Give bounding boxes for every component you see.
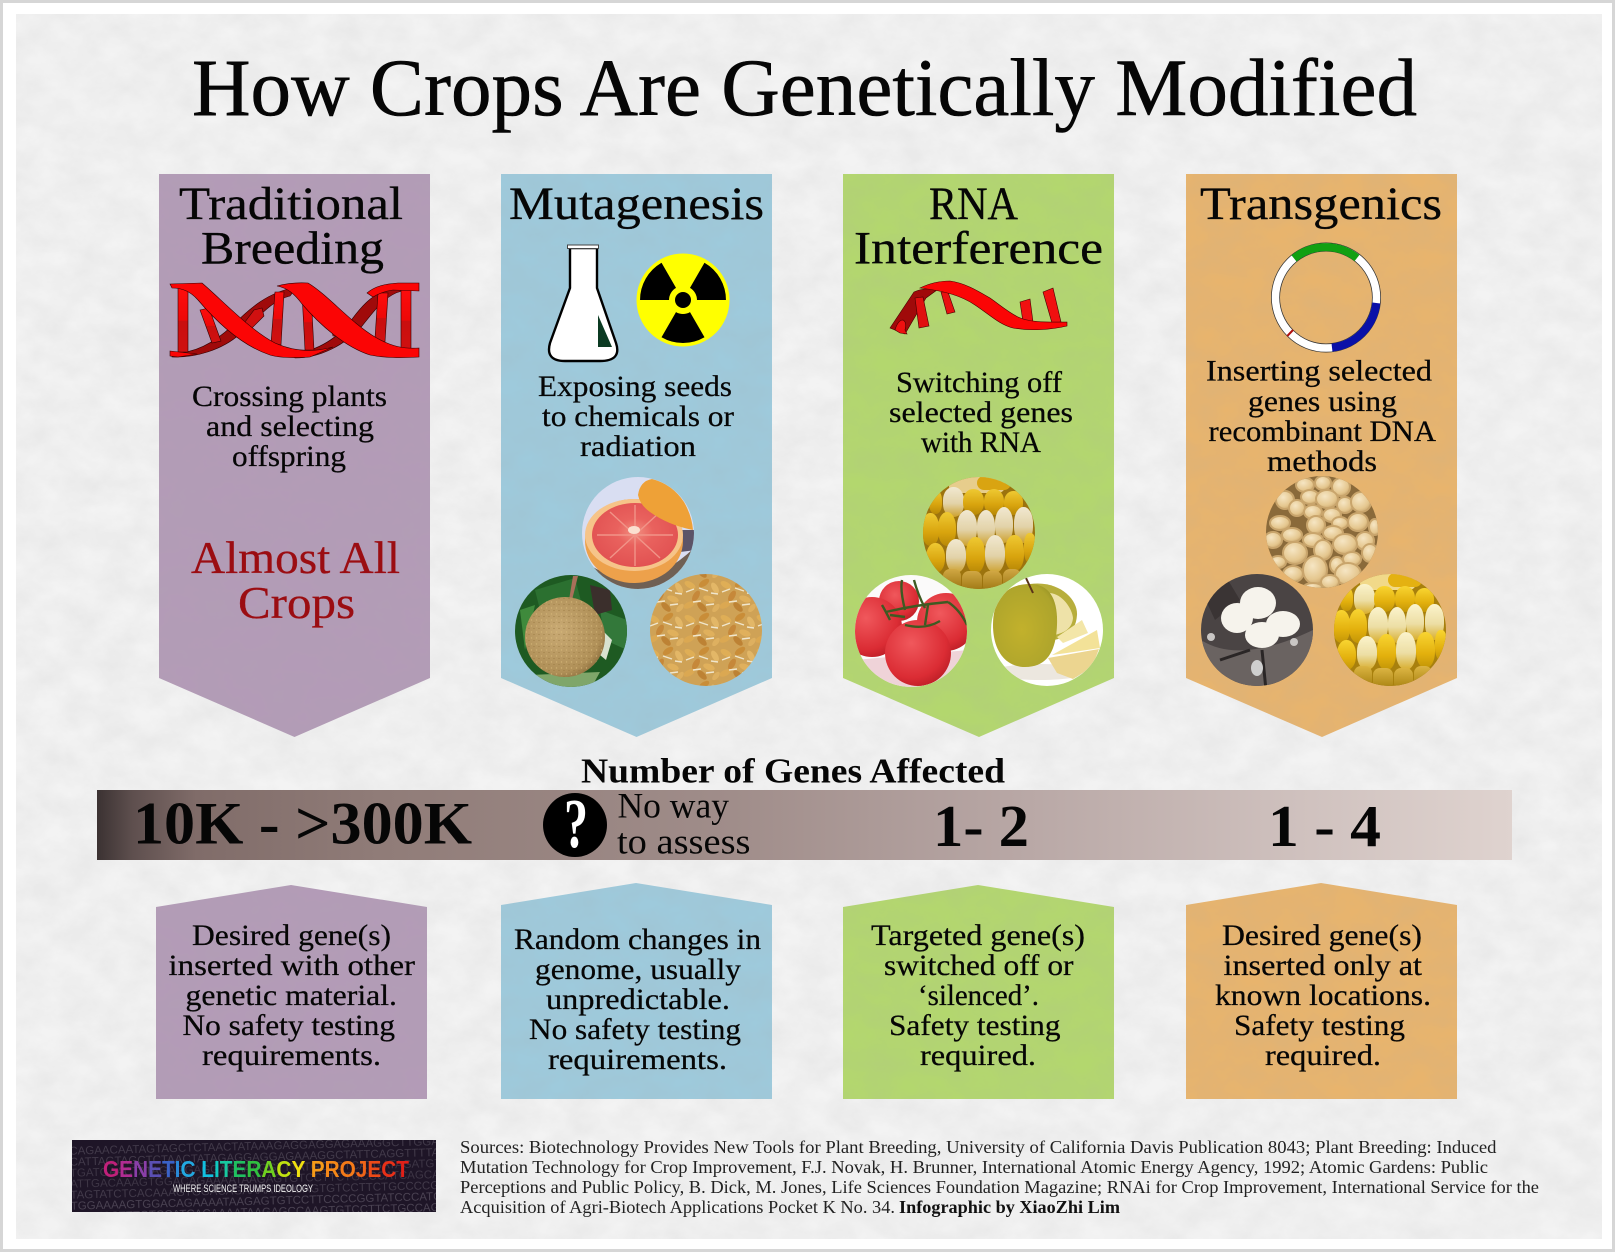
heading: mutagenesis: Mutagenesis — [509, 178, 764, 230]
box text: transgenics — [1215, 919, 1431, 1072]
panel: traditional breeding — [170, 178, 419, 628]
photo: corn — [1334, 574, 1446, 686]
value: RNA interference: 1- 2 — [933, 793, 1029, 859]
logo: genetic literacy project: GCTTCCTTTGTCCATCACAAAATAAGAGCCAAGTGTCCTTCTGCCAGCAATTTTTATTGAGTGGAAGAAGTTGCTACTTA — [71, 1195, 691, 1224]
heading: RNA interference: RNA — [929, 178, 1018, 230]
box text: RNA interference: required. — [920, 1039, 1036, 1072]
heading: RNA interference — [854, 178, 1103, 274]
description: mutagenesis: radiation — [580, 430, 696, 463]
description: traditional breeding — [192, 380, 387, 473]
icon: question mark — [543, 786, 607, 863]
icon: radiation symbol — [635, 254, 731, 346]
sources and credit: Mutation Technology for Crop Improvement, F.J. Novak, H. Brunner, International Atomic Energy Agency, 1992; Atomic Gardens: Public — [460, 1157, 1488, 1177]
panel: RNA interference — [842, 178, 1104, 690]
photo: apple — [990, 574, 1104, 688]
logo: genetic literacy project: GENETIC LITERACY PROJECT — [103, 1156, 409, 1182]
value: mutagenesis: to assess — [617, 822, 750, 862]
value: transgenics: 1 - 4 — [1268, 793, 1381, 859]
icon: DNA double helix — [170, 283, 419, 358]
box text: traditional breeding: inserted with other — [168, 949, 415, 982]
box text: transgenics: known locations. — [1215, 979, 1431, 1012]
icon: flask — [549, 245, 617, 361]
crops note: almost all crops: Almost All — [191, 532, 400, 583]
gradient bar — [97, 790, 1512, 860]
value: mutagenesis: No way — [618, 786, 729, 826]
logo: genetic literacy project — [72, 1140, 436, 1212]
box text: traditional breeding: Desired gene(s) — [192, 919, 391, 952]
sources and credit: Sources: Biotechnology Provides New Tools for Plant Breeding, University of California Davis Publication 8043; Plant Breeding: Induced — [460, 1137, 1496, 1157]
box text: traditional breeding: genetic material. — [186, 979, 397, 1012]
logo: genetic literacy project: TAGTATCTCACAAAGTGGACAGAAAATAAGAGTGTCCTTCTGCCCCGGTATCCCATCAAGCAATTTTATTGAGTGGAGA — [70, 1174, 686, 1202]
description: mutagenesis: Exposing seeds — [538, 370, 732, 403]
crops note: almost all crops — [191, 532, 400, 628]
axis heading: number of genes affected: Number of Genes Affected — [581, 752, 1006, 790]
description: RNA interference: selected genes — [889, 396, 1073, 429]
heading: traditional breeding — [179, 178, 403, 274]
photo: corn — [923, 477, 1035, 589]
box text: mutagenesis — [514, 923, 761, 1076]
description: RNA interference — [889, 366, 1073, 459]
logo: genetic literacy project: CATTAGTAGCTCTAACTATAGAGGAGGAGAAAGGCTATTCAGGTTTTATGCTGTCCCATGATAGATGTTAAACCAGTATCTCC — [69, 1140, 707, 1169]
box text: mutagenesis: requirements. — [548, 1043, 727, 1076]
box text: transgenics: Desired gene(s) — [1222, 919, 1422, 952]
description: traditional breeding: offspring — [232, 440, 346, 473]
photo: rice grains — [650, 574, 762, 686]
sources and credit: Infographic by XiaoZhi Lim — [899, 1197, 1120, 1217]
description: RNA interference: Switching off — [896, 366, 1062, 399]
box text: mutagenesis: unpredictable. — [546, 983, 730, 1016]
description: mutagenesis — [538, 370, 734, 463]
box text: mutagenesis: Random changes in — [514, 923, 761, 956]
panel: mutagenesis — [509, 178, 764, 690]
photo: grapefruit — [580, 475, 696, 595]
photo: tomatoes — [855, 575, 967, 687]
box text: traditional breeding — [168, 919, 415, 1072]
box text: RNA interference: ‘silenced’. — [918, 979, 1039, 1012]
description: traditional breeding: and selecting — [206, 410, 374, 443]
logo: genetic literacy project: TGGAAAAGTGGACAGAAAATAAGAGTGTCCTTCCCCGGTATCCCATCTTTTTAAGGGGAGAGGAGGGAGAAGTTGTTAC — [71, 1184, 697, 1213]
logo: genetic literacy project: WHERE SCIENCE TRUMPS IDEOLOGY — [173, 1183, 313, 1195]
box text: RNA interference — [871, 919, 1085, 1072]
panel shapes: top banners and bottom boxes — [156, 174, 1457, 1099]
description: transgenics: Inserting selected — [1206, 354, 1432, 388]
box text: traditional breeding: No safety testing — [182, 1009, 395, 1042]
description: transgenics — [1206, 354, 1436, 478]
heading: RNA interference: Interference — [854, 222, 1103, 274]
sources and credit — [460, 1137, 1539, 1217]
logo: genetic literacy project: ATTGACAAAGTGGACAGAAAATAAGAGTGTCCTTCTGCCCATCAGCAATTTTATTGAGTGGAGCCGCGTCCTTCCTGCG — [70, 1162, 692, 1191]
description: transgenics: methods — [1267, 445, 1377, 478]
logo: genetic literacy project: CAGAACAATAGTAGCTCTAACTATAAAGAGGAGGAGAAAGGCTTGGAGGTTTATGCTGTCATAGATGTTAAACAAAGC — [69, 1130, 677, 1158]
title: How Crops Are Genetically Modified — [192, 42, 1417, 133]
box text: mutagenesis: No safety testing — [529, 1013, 741, 1046]
description: mutagenesis: to chemicals or — [542, 400, 734, 433]
box text: RNA interference: Safety testing — [889, 1009, 1060, 1042]
box text: transgenics: inserted only at — [1224, 949, 1423, 982]
box text: RNA interference: Targeted gene(s) — [871, 919, 1085, 952]
box text: transgenics: required. — [1265, 1039, 1381, 1072]
icon: RNA strand — [890, 281, 1067, 334]
icon: question mark: ? — [564, 786, 588, 863]
box text: RNA interference: switched off or — [884, 949, 1074, 982]
box text: traditional breeding: requirements. — [202, 1039, 381, 1072]
photo: asian pear — [515, 575, 627, 690]
box text: mutagenesis: genome, usually — [535, 953, 741, 986]
description: transgenics: recombinant DNA — [1208, 415, 1436, 448]
photo: soybeans — [1264, 476, 1381, 591]
heading: traditional breeding: Traditional — [179, 178, 403, 230]
heading: traditional breeding: Breeding — [201, 222, 384, 274]
sources and credit: Perceptions and Public Policy, B. Dick, M. Jones, Life Sciences Foundation Magazine; RNAi for Crop Improvement, International Service for the — [460, 1177, 1539, 1197]
heading: transgenics: Transgenics — [1200, 178, 1442, 230]
scale bar: genes affected — [97, 786, 1512, 863]
sources and credit: Acquisition of Agri-Biotech Applications Pocket K No. 34. — [460, 1197, 895, 1217]
description: RNA interference: with RNA — [921, 426, 1041, 459]
description: transgenics: genes using — [1248, 385, 1397, 418]
crops note: almost all crops: Crops — [238, 577, 355, 628]
description: traditional breeding: Crossing plants — [192, 380, 387, 413]
box text: transgenics: Safety testing — [1234, 1009, 1405, 1042]
panel: transgenics — [1200, 178, 1450, 690]
icon: plasmid ring — [1276, 247, 1376, 348]
value: mutagenesis — [617, 786, 750, 862]
photo: cotton — [1201, 574, 1313, 690]
logo: genetic literacy project: TGATGAACTATAGAGGAGGAGAAAGGTTTATGCTGTCATGATAGATGTTAAACCTTATTTTACCAGTATCTAACTATT — [70, 1152, 661, 1180]
value: traditional breeding: 10K - >300K — [133, 791, 472, 857]
